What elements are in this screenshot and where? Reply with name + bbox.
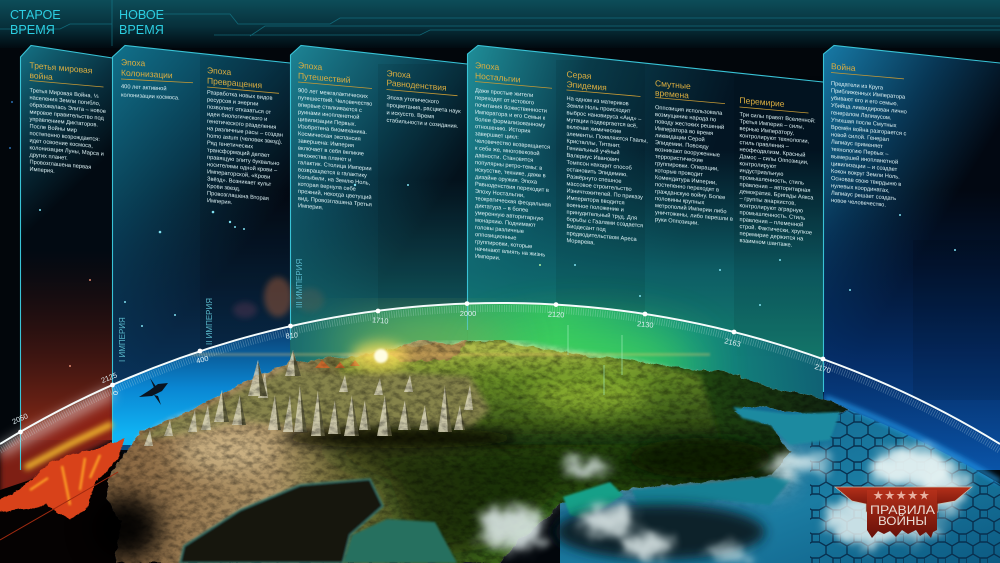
text column: Troubled Times: ликвидации Серой — [655, 132, 705, 143]
text column: Truce: контролируют аграрную — [740, 203, 804, 215]
timeline dates: 400 — [195, 354, 209, 366]
header band with circuit lines — [0, 0, 1000, 48]
timeline dates: 2125 — [100, 370, 118, 385]
text column: Nostalgia: умеренную авторитарную — [475, 210, 544, 222]
text column: Grey Epidemic: Изничтожителей. По приказу — [566, 187, 643, 201]
text column: Transformation: правящую элиту буквально — [207, 155, 279, 167]
text column: Troubled Times: Смутные — [655, 78, 691, 91]
text column: War: цивилизации – и создает — [831, 161, 898, 173]
coastal sea — [632, 477, 790, 510]
text column: Colonization: 400 лет активной — [121, 83, 167, 92]
mountain lit faces — [144, 350, 473, 446]
text column: Travel: впервые сталкивается с — [298, 102, 362, 114]
dark lowland — [555, 504, 765, 560]
text column: Equinox — [386, 68, 461, 130]
text column: Truce: контролируют — [740, 161, 777, 170]
text column: Grey Epidemic: включая химические — [566, 124, 621, 135]
text column: War: технологию Первых – — [831, 147, 889, 158]
text column: Truce: стиль правления – — [740, 140, 790, 150]
text column: Nostalgia: Ностальгии — [475, 71, 521, 85]
text column: Grey Epidemic: выброс нановируса «Аид» – — [566, 110, 642, 123]
panel: Nostalgia, Epidemic, Troubles, Truce — [468, 46, 823, 420]
desert light — [175, 426, 275, 474]
text column: Equinox: Равноденствия — [386, 78, 447, 93]
logo body — [867, 490, 937, 538]
text column: Nostalgia: оппозиционные — [475, 232, 516, 242]
text column: Travel — [298, 60, 372, 216]
text column: Nostalgia: начинают влиять на жизнь — [475, 246, 545, 259]
text column: War: новой силой. Генерал — [831, 131, 889, 143]
text column: Travel: вид. Провозглашена Третья — [298, 196, 372, 208]
timeline dates: 2170 — [814, 362, 832, 375]
text column: Truce: индустриальную — [740, 168, 784, 178]
lava continent — [0, 424, 125, 540]
text column: Nostalgia: Даже простые жители — [475, 88, 533, 99]
text column: War: Приближенных Императора — [831, 88, 906, 101]
text column: Truce: – группы анархистов, — [740, 196, 796, 207]
clouds — [478, 448, 967, 561]
lava rim — [25, 424, 112, 468]
text column: War: Утихшая после Смутных — [831, 118, 897, 129]
timeline dates: 2163 — [724, 336, 742, 349]
nebula — [233, 277, 324, 318]
lava veins — [30, 455, 100, 505]
text column: Transformation: Разработка новых видов — [207, 90, 272, 102]
text column: Truce: промышленность. Стиль — [740, 210, 805, 222]
text column: Equinox: Эпоха — [386, 68, 411, 80]
text column: Travel: которая вернула себе — [298, 182, 356, 193]
text column: Truce: правления – авторитарная — [740, 182, 810, 194]
lake — [563, 482, 623, 520]
text column: Grey Epidemic: принудительный труд. Для — [566, 209, 637, 222]
logo title: ПРАВИЛА — [870, 505, 935, 517]
text column: Truce: контролируют технологии, — [740, 133, 810, 145]
planet blue rim — [825, 398, 1000, 482]
text column: Grey Epidemic: Развёрнуто спешное — [566, 174, 622, 185]
text column: Transformation: Императорской, «Крови — [207, 168, 270, 181]
text column: Travel: галактик. Столица Империи — [298, 160, 372, 172]
text column: Grey Epidemic: мутации подвергается всё, — [566, 117, 638, 130]
text column: War: новое человечество. — [831, 198, 886, 209]
text column: Transformation: Империя. — [207, 198, 233, 206]
text column: Travel: 900 лет межгалактических — [298, 88, 368, 100]
text column: Transformation — [207, 65, 283, 211]
text column: Nostalgia: почитания божественности — [475, 102, 547, 115]
text column: Nostalgia: Императора и его Семьи к — [475, 110, 546, 122]
text column: Travel: Колыбели, на Землю Ноль, — [298, 174, 371, 187]
text column: Troubled Times: постепенно переходят в — [655, 182, 719, 194]
text column: Grey Epidemic — [566, 69, 648, 251]
text column: War: Лапиаус применяет — [831, 139, 883, 150]
land base — [105, 340, 850, 563]
text column: Grey Epidemic: Серая — [566, 69, 592, 81]
text column: Colonization: Эпоха — [121, 57, 145, 68]
text column: Nostalgia: Империи. — [475, 254, 501, 262]
text column: Third World War: управлением Диктаторов. — [30, 117, 98, 129]
text column: Third World War: Третья Мировая Война. ⅓ — [30, 87, 99, 100]
desert shadow — [89, 495, 161, 561]
text column: War: нулевых координатах, — [831, 183, 890, 194]
text column: Nostalgia: Эпоху Ностальгии, — [475, 189, 525, 199]
era label: I empire: I ИМПЕРИЯ — [118, 317, 127, 362]
text column: Third World War: война — [30, 70, 53, 82]
heading: old time: ВРЕМЯ — [10, 23, 55, 37]
text column: Nostalgia — [475, 60, 552, 266]
panel: Third World War — [20, 46, 112, 480]
text column: Truce: демократия. Бригады Аякса — [740, 189, 814, 202]
text column: Nostalgia: отношению. История — [475, 124, 531, 135]
text column: Travel: Эпоха — [298, 60, 322, 72]
logo wings — [835, 487, 972, 512]
timeline dates: 2120 — [548, 310, 565, 319]
text column: Troubled Times: группировки. Операции, — [655, 161, 719, 173]
timeline nodes — [18, 301, 825, 434]
text column: Troubled Times: руки Оппозиции. — [655, 217, 699, 227]
text column: Nostalgia: Эпоха — [475, 60, 499, 72]
text column: Third World War: других планет. — [30, 152, 68, 162]
text column: Grey Epidemic: Императора вводится — [566, 195, 625, 206]
heading: new time: НОВОЕ — [119, 8, 164, 22]
timeline dates: 810 — [285, 330, 298, 341]
text column: Nostalgia: популярны ретро-темы: в — [475, 160, 542, 172]
timeline dates: 0 — [111, 391, 120, 395]
text column: War — [831, 61, 907, 210]
text column: War: Война — [831, 61, 856, 73]
text column: Travel: руинами инопланетной — [298, 109, 359, 121]
orange peaks — [315, 360, 360, 368]
mountain dark faces — [222, 350, 465, 436]
text column: Troubled Times: половины крупных — [655, 196, 704, 206]
panel: Travel and Equinox — [290, 46, 467, 400]
text column: Truce: Третья Империя – силы, — [740, 119, 804, 131]
text column: Troubled Times: которые проводит — [655, 168, 703, 178]
text column: Travel: Космическая экспансия — [298, 131, 361, 143]
text column: Troubled Times: поводу жестоких решений — [655, 118, 724, 131]
lava edge line — [0, 472, 118, 540]
text column: Third World War: идет освоение космоса, — [30, 138, 93, 150]
text column: Travel: прежний, некогда цветущий — [298, 188, 372, 201]
dark southwest — [0, 452, 161, 563]
panel: War — [824, 46, 1000, 470]
text column: Third World War: постепенно возрождается: — [30, 131, 100, 143]
text column: Travel: возвращается в галактику — [298, 167, 367, 179]
lava mass — [0, 438, 125, 520]
text column: Transformation: трансформаций делает — [207, 147, 270, 159]
text column: Equinox: процветания, расцвета наук — [386, 103, 461, 115]
text column: Nostalgia: группировки, которые — [475, 239, 532, 250]
ocean — [560, 400, 1000, 563]
text column: Nostalgia: теократическая феодальная — [475, 196, 551, 209]
teal bay — [343, 519, 457, 563]
text column: Truce: верные Императору, — [740, 126, 794, 137]
distant hills — [390, 340, 470, 362]
text column: Travel: завершена: Империя — [298, 138, 354, 149]
text column: War: Основав свою твердыню в — [831, 176, 901, 188]
text column: Grey Epidemic: Морарева. — [566, 238, 595, 247]
planet — [0, 395, 1000, 563]
text column: War: Предатели из Круга — [831, 81, 884, 92]
text column: Nostalgia: дизайне оружия. Эпоха — [475, 173, 538, 186]
timeline dates — [11, 309, 832, 426]
text column: Third World War: колонизация Луны, Марса и — [30, 145, 104, 158]
heading: new time: ВРЕМЯ — [119, 23, 164, 37]
hexagon shield — [810, 395, 1000, 563]
timeline dates: 2000 — [460, 309, 476, 318]
text column: Third World War: Империя. — [30, 167, 55, 175]
land light — [340, 340, 720, 450]
era label: III empire: III ИМПЕРИЯ — [295, 259, 304, 308]
text column: Troubled Times: Комендатура Империи, — [655, 175, 717, 186]
northern inlet — [733, 407, 840, 445]
text column: Transformation: Ряд генетических — [207, 140, 253, 150]
text column: Truce: правления – племенной — [740, 216, 803, 229]
text column: Transformation: Провозглашена Вторая — [207, 191, 269, 202]
text column: Nostalgia: головы различные — [475, 225, 524, 235]
text column: Troubled Times: гражданскую войну. Более — [655, 188, 725, 201]
text column: Colonization: Колонизации — [121, 68, 173, 80]
text column: Grey Epidemic: Кристаллы, Титанит. — [566, 139, 621, 149]
text column: Transformation: идеи биологического и — [207, 112, 267, 123]
text column: Grey Epidemic: массовое строительство — [566, 181, 632, 193]
text column: Nostalgia: искусстве, технике, даже в — [475, 167, 546, 179]
text column: Nostalgia: завершает цикл: — [475, 131, 519, 141]
text column: Truce: Перемирие — [740, 95, 785, 109]
text column: Third World War: После Войны мир — [30, 123, 77, 134]
text column: Travel: путешествий. Человечество — [298, 94, 372, 108]
text column: Third World War: Третья мировая — [30, 60, 93, 76]
text column: Nostalgia: давности. Становятся — [475, 153, 533, 164]
text column: Truce: Три силы правят Вселенной: — [740, 111, 816, 125]
text column: Truce: перемирие держится на — [740, 231, 804, 243]
text column: Transformation: позволяет отказаться от — [207, 104, 271, 116]
towers — [568, 325, 622, 395]
blue sky below timeline — [112, 326, 290, 445]
text column: Troubled Times: возмущение народа по — [655, 112, 716, 123]
text column: Travel: Империя. — [298, 203, 324, 211]
lowland shade — [310, 445, 790, 560]
timeline dates: 2050 — [11, 411, 29, 426]
text column: Truce: промышленность, стиль — [740, 175, 804, 187]
text column: Grey Epidemic: элементы. Появляются Гаалы, — [566, 132, 648, 145]
text column: War: вымершей инопланетной — [831, 153, 898, 166]
atmospheric glow — [330, 327, 700, 400]
timeline dates: 1710 — [372, 315, 389, 326]
mountain shadow — [282, 428, 518, 448]
text column: Truce — [740, 95, 816, 251]
text column: Grey Epidemic: предводительством Ареса — [566, 231, 637, 243]
text column: Transformation: Звёзд». Возникает культ — [207, 176, 272, 188]
text column: Grey Epidemic: борьбы с Гаалами создается — [566, 217, 643, 229]
text column: Equinox: и искусств. Время — [386, 110, 434, 120]
text column: Troubled Times: Оппозиция использовала — [655, 105, 723, 117]
text column: Third World War: населения Земли погибло, — [30, 95, 101, 107]
text column: Nostalgia: к себе же, многовековой — [475, 145, 540, 157]
text column: Nostalgia: диктатура – в более — [475, 203, 528, 214]
green sky below timeline — [290, 303, 823, 425]
text column: Troubled Times: времена — [655, 88, 689, 100]
logo title: ВОЙНЫ — [878, 515, 927, 528]
text column: Grey Epidemic: Томпсон находит способ — [566, 160, 632, 172]
text column: Equinox: стабильности и созидания. — [386, 118, 459, 130]
text column: Transformation: Крови звезд. — [207, 184, 241, 193]
text column: Transformation: на различные расы – создан — [207, 126, 283, 139]
text column: Transformation: носителями одной крови – — [207, 161, 278, 174]
text column: Nostalgia: более формализованному — [475, 117, 545, 129]
text column: Troubled Times: террористические — [655, 154, 703, 164]
text column: Nostalgia: Равноденствия переходит в — [475, 182, 549, 194]
text column: War: Убийца ликвидирован лично — [831, 102, 907, 116]
land mass — [105, 340, 850, 563]
era label: II empire: II ИМПЕРИЯ — [205, 298, 214, 345]
text column: Troubled Times: Эпидемии. Повсюду — [655, 140, 709, 151]
dark forest east — [630, 438, 770, 478]
text column: War: убивают его и его семью. — [831, 96, 898, 107]
text column: Truce: Дамос – силы Оппозиции, — [740, 154, 809, 166]
text column: Troubled Times: возникают вооруженные — [655, 147, 720, 159]
text column: Troubled Times — [655, 78, 733, 230]
text column: Grey Epidemic: военное положение и — [566, 203, 624, 214]
panel: Colonization and Transformation — [112, 46, 290, 450]
timeline glow — [0, 392, 112, 452]
logo: Rules of War — [835, 487, 972, 538]
text column: Truce: взаимном шантаже. — [740, 238, 793, 249]
text column: Travel: Изобретена биомеханика. — [298, 124, 367, 136]
text column: Grey Epidemic: Земли Ноль происходит — [566, 103, 631, 115]
text column: Transformation: homo astum (человек звезд). — [207, 133, 283, 146]
text column: Troubled Times: метрополий Империи либо — [655, 202, 727, 215]
text column: Grey Epidemic: Эпидемия — [566, 79, 607, 93]
bright plain — [530, 377, 650, 413]
text column: Grey Epidemic: Валериус Иванович — [566, 153, 619, 163]
timeline arc — [0, 303, 1000, 450]
text column: Nostalgia: монархию. Поднимают — [475, 218, 536, 229]
text column: Colonization: колонизации космоса. — [121, 93, 180, 102]
logo stars: ★★★★★ — [873, 491, 931, 502]
text column: Grey Epidemic: остановить Эпидемию. — [566, 167, 628, 178]
timeline dates: 2130 — [637, 319, 654, 330]
text column: Grey Epidemic: Биодесант под — [566, 224, 606, 233]
text column: Travel: включает в себя великие — [298, 146, 364, 157]
text column: Grey Epidemic: На одном из материков — [566, 96, 629, 107]
text column: War: Лапиаус решает создать — [831, 191, 896, 202]
text column: Troubled Times: Императора во время — [655, 126, 713, 137]
spaceship — [139, 378, 168, 405]
text column: Transformation: генетического разделения — [207, 119, 276, 131]
text column: Travel: Путешествий — [298, 71, 351, 85]
text column: Transformation: Эпоха — [207, 65, 231, 77]
panel borders — [20, 46, 1000, 470]
text column: War: генералом Лапиаусом. — [831, 110, 892, 122]
text column: War: Кокон вокруг Земли Ноль. — [831, 169, 900, 181]
red band of the old era — [0, 388, 112, 500]
sun flare — [190, 342, 710, 370]
text column: Troubled Times: уничтожены, либо перешли в — [655, 210, 733, 223]
text column: Transformation: Превращения — [207, 76, 262, 90]
stars — [9, 101, 956, 367]
text column: Truce: неофеодализм. Красный — [740, 146, 805, 159]
text column: Travel: множества планет и — [298, 153, 351, 163]
text column: Third World War: Провозглашена первая — [30, 160, 91, 171]
heading: old time: СТАРОЕ — [10, 8, 61, 22]
text column: Colonization — [121, 57, 193, 102]
text column: Equinox: Эпоха утопического — [386, 95, 439, 106]
text column: Truce: строй. Фактически, хрупкое — [740, 223, 812, 236]
text column: Nostalgia: переходят от истового — [475, 95, 534, 106]
text column: Travel: цивилизации Первых. — [298, 117, 357, 128]
text column: War: Времён война разгорается с — [831, 124, 906, 137]
text column: Third World War: образовалась Элита – новое — [30, 102, 106, 115]
dark sea — [180, 479, 383, 563]
text column: Nostalgia: человечество возвращается — [475, 138, 550, 151]
text column: Grey Epidemic: Гениальный учёный — [566, 145, 620, 156]
text column: Third World War: мировое правительство под — [30, 109, 104, 122]
mountain ridge — [135, 368, 490, 440]
text column: Third World War — [30, 60, 106, 179]
text column: Transformation: ресурсов и энергии — [207, 97, 258, 108]
